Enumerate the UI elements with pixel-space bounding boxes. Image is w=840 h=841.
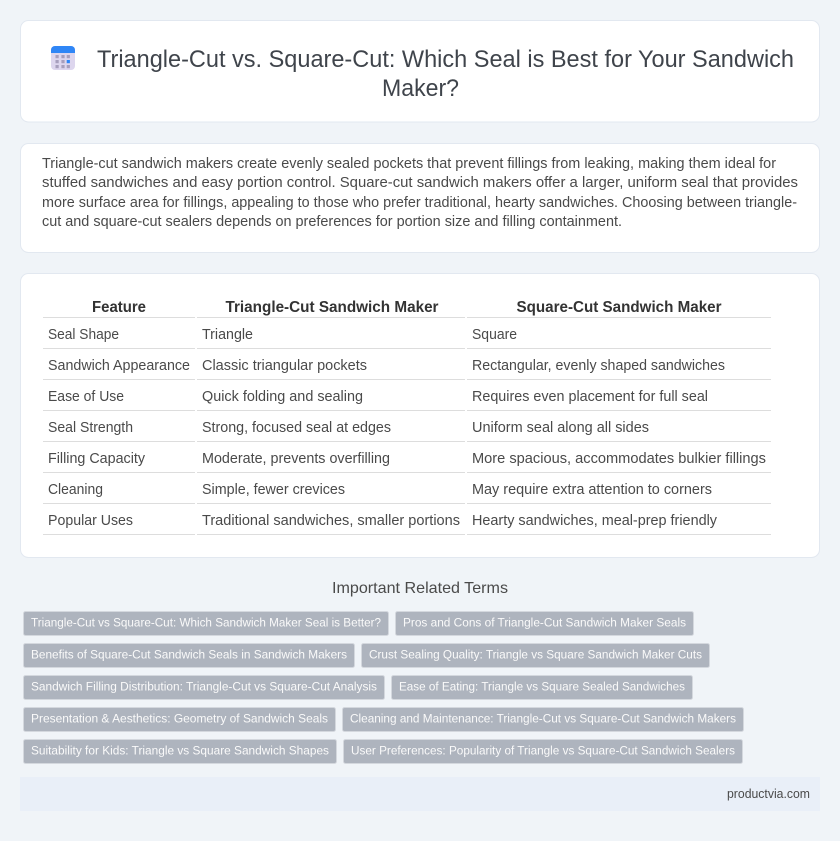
table rows: Simple, fewer crevices (202, 482, 345, 498)
table header: Triangle-Cut Sandwich Maker (226, 299, 438, 316)
table rows: Triangle (202, 327, 253, 343)
table rows: Strong, focused seal at edges (202, 420, 391, 436)
related term tags (24, 612, 744, 764)
title: Maker? (382, 75, 459, 102)
related term tags: User Preferences: Popularity of Triangle vs Square-Cut Sandwich Sealers (351, 744, 735, 758)
panel: comparison table (20, 274, 820, 558)
related term tags: Ease of Eating: Triangle vs Square Sealed Sandwiches (399, 680, 685, 694)
table rows: Seal Shape (48, 327, 119, 343)
panel: title header (20, 20, 820, 122)
table rows: Classic triangular pockets (202, 358, 367, 374)
related term tags: Pros and Cons of Triangle-Cut Sandwich Maker Seals (403, 616, 686, 630)
footer: site name: productvia.com (727, 787, 810, 801)
related term tags: Suitability for Kids: Triangle vs Square Sandwich Shapes (31, 744, 329, 758)
table rows: Rectangular, evenly shaped sandwiches (472, 358, 725, 374)
panel: intro text (20, 144, 820, 252)
related term tags: Presentation & Aesthetics: Geometry of Sandwich Seals (31, 712, 328, 726)
table header: Square-Cut Sandwich Maker (516, 299, 722, 316)
table rows: More spacious, accommodates bulkier fillings (472, 451, 766, 467)
intro paragraph: stuffed sandwiches and easy portion control. Square-cut sandwich makers offer a larger, uniform seal that provides (42, 175, 798, 191)
table rows: Hearty sandwiches, meal-prep friendly (472, 513, 718, 529)
table rows: Ease of Use (48, 389, 124, 405)
table rows: Filling Capacity (48, 451, 146, 467)
table rows: Sandwich Appearance (48, 358, 190, 374)
table rows: Seal Strength (48, 420, 133, 436)
related term tags: Sandwich Filling Distribution: Triangle-Cut vs Square-Cut Analysis (31, 680, 377, 694)
title: Triangle-Cut vs. Square-Cut: Which Seal is Best for Your Sandwich (97, 46, 794, 73)
table rows: Uniform seal along all sides (472, 420, 649, 436)
table header: Feature (92, 299, 146, 316)
related term tags: Crust Sealing Quality: Triangle vs Square Sandwich Maker Cuts (369, 648, 702, 662)
intro paragraph: cut and square-cut sealers depends on preferences for portion size and filling containment. (42, 214, 622, 230)
table header (92, 299, 722, 316)
table rows: Traditional sandwiches, smaller portions (202, 513, 460, 529)
footer bar (20, 777, 820, 811)
table rows: May require extra attention to corners (472, 482, 712, 498)
related term tags: Benefits of Square-Cut Sandwich Seals in Sandwich Makers (31, 648, 347, 662)
table rows: Quick folding and sealing (202, 389, 363, 405)
table rows: Moderate, prevents overfilling (202, 451, 390, 467)
heading: related terms: Important Related Terms (332, 580, 508, 597)
intro paragraph: Triangle-cut sandwich makers create evenly sealed pockets that prevent fillings from leaking, making them ideal for (42, 156, 776, 172)
related term tags: Cleaning and Maintenance: Triangle-Cut vs Square-Cut Sandwich Makers (350, 712, 736, 726)
related term tags: Triangle-Cut vs Square-Cut: Which Sandwich Maker Seal is Better? (31, 616, 381, 630)
table rows: Requires even placement for full seal (472, 389, 708, 405)
table rows: Cleaning (48, 482, 103, 498)
icon: calendar (51, 46, 75, 70)
intro paragraph: more surface area for fillings, appealing to those who prefer traditional, hearty sandwiches. Choosing between triangle- (42, 195, 797, 211)
table rows (48, 327, 766, 529)
table rows: Popular Uses (48, 513, 133, 529)
table rows: Square (472, 327, 517, 343)
